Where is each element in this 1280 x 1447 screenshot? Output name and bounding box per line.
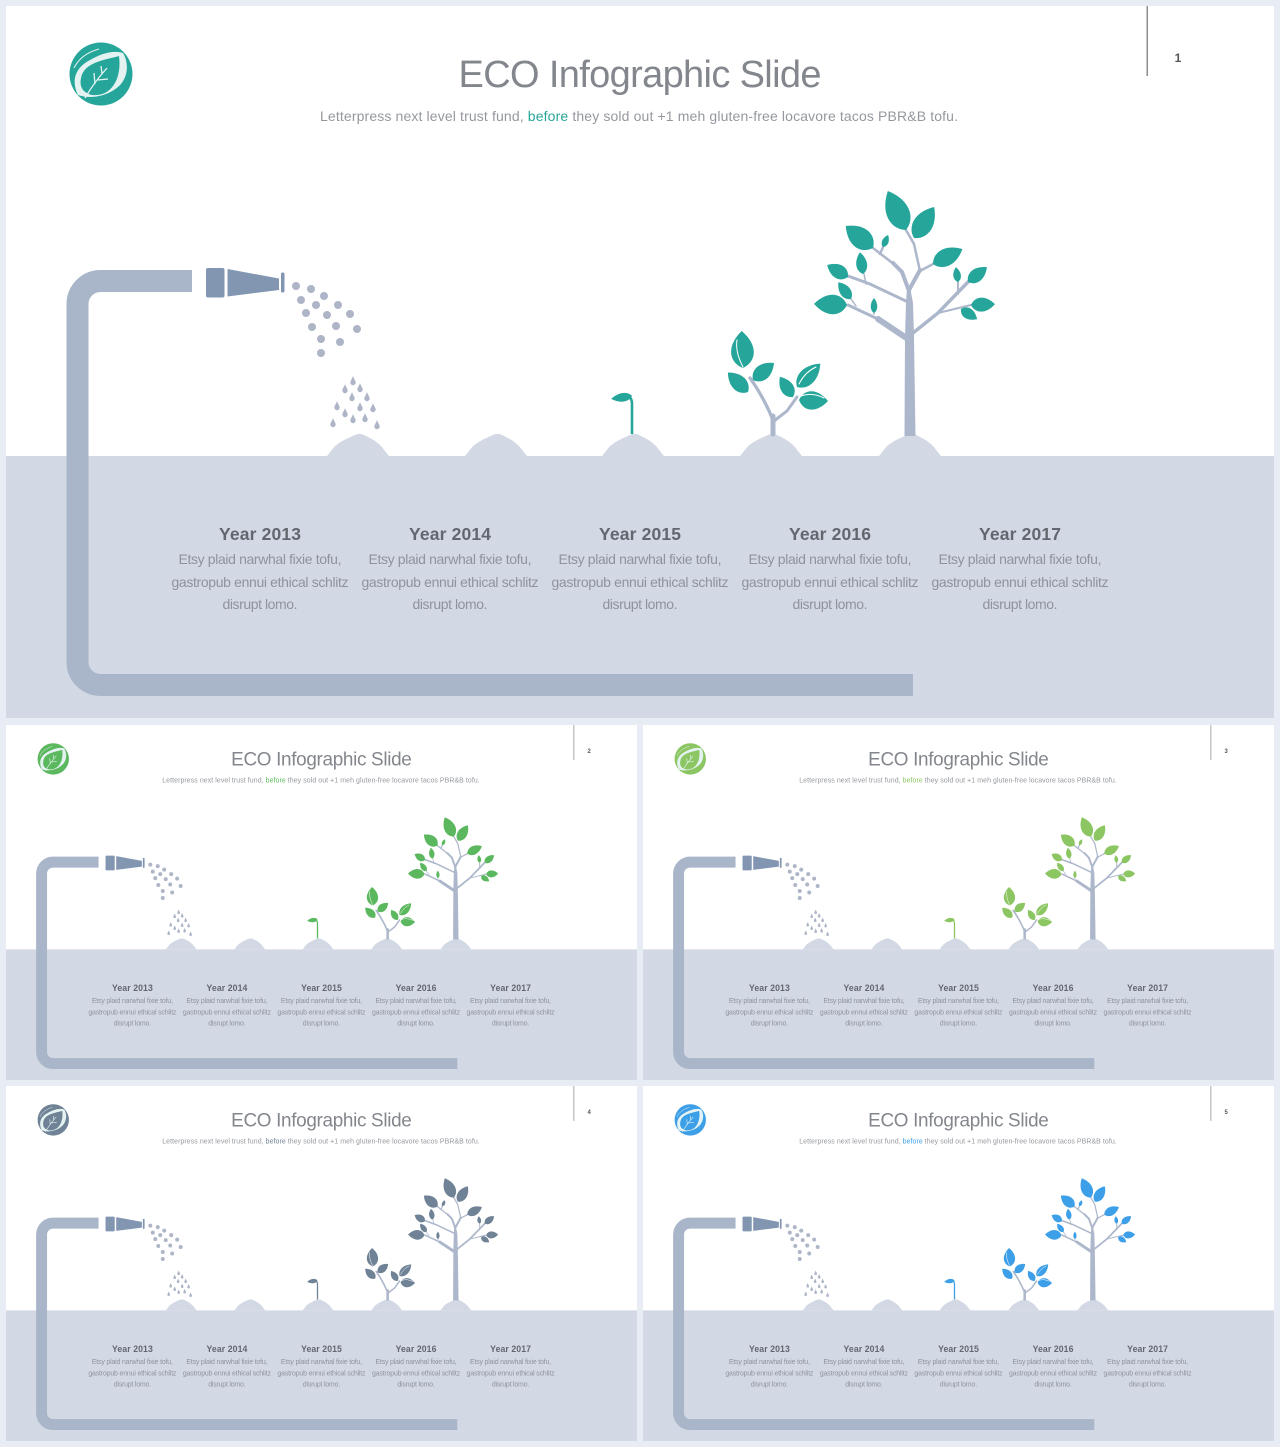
timeline text: 2013 — [172, 524, 348, 612]
timeline text: 2017 — [932, 524, 1108, 612]
slide 5 title: ECO Infographic Slide — [868, 1110, 1049, 1131]
timeline text: 2015: Etsy plaid narwhal fixie tofu, — [558, 551, 722, 567]
slide 2 timeline text: Year 2014 — [207, 983, 247, 993]
slide 3 timeline text: gastropub ennui ethical schlitz — [820, 1010, 908, 1017]
slide 3 timeline text: Etsy plaid narwhal fixie tofu, — [729, 998, 810, 1005]
slide 4 timeline text: Year 2017 — [490, 1344, 531, 1354]
slide 3 timeline text: gastropub ennui ethical schlitz — [725, 1010, 814, 1017]
slide 3 timeline text: Year 2017 — [1127, 983, 1168, 993]
slide 3 timeline text: disrupt lomo. — [1034, 1021, 1072, 1028]
slide 4 timeline text: Etsy plaid narwhal fixie tofu, — [92, 1359, 173, 1366]
slide 4 timeline text: Year 2016 — [396, 1344, 437, 1354]
slide 2 timeline text: gastropub ennui ethical schlitz — [277, 1010, 366, 1017]
timeline text: 2014: gastropub ennui ethical schlitz — [362, 574, 538, 590]
timeline text: 2013: Year 2013 — [219, 524, 301, 544]
slide 4 timeline text: Year 2014 — [207, 1344, 247, 1354]
slide 2 timeline text: disrupt lomo. — [114, 1021, 151, 1028]
slide 5 timeline text: gastropub ennui ethical schlitz — [914, 1371, 1003, 1378]
slide 5 timeline text: Year 2016 — [1033, 1344, 1074, 1354]
slide 4 timeline text: gastropub ennui ethical schlitz — [467, 1371, 555, 1378]
slide 2 timeline text: Etsy plaid narwhal fixie tofu, — [281, 998, 362, 1005]
slide 5 timeline text — [725, 1344, 1192, 1389]
slide 3 page number: 3 — [1225, 749, 1229, 755]
slide 5 timeline text: gastropub ennui ethical schlitz — [725, 1371, 814, 1378]
timeline text: 2016: gastropub ennui ethical schlitz — [742, 574, 918, 590]
slide 3 timeline text: disrupt lomo. — [751, 1021, 788, 1028]
page marker line — [1146, 6, 1148, 76]
timeline text: 2016 — [742, 524, 918, 612]
timeline text: 2015 — [552, 524, 728, 612]
timeline text: 2014: Year 2014 — [409, 524, 491, 544]
icon: leaf logo — [70, 42, 132, 106]
timeline text: 2013: Etsy plaid narwhal fixie tofu, — [178, 551, 342, 567]
slide 5 timeline text: Year 2013 — [749, 1344, 790, 1354]
timeline text: 2016: Etsy plaid narwhal fixie tofu, — [748, 551, 912, 567]
slide 2 timeline text: gastropub ennui ethical schlitz — [88, 1010, 177, 1017]
slide 3 timeline text: Year 2015 — [938, 983, 979, 993]
slide 3 timeline text: Etsy plaid narwhal fixie tofu, — [1012, 998, 1094, 1005]
slide 2 subtitle: Letterpress next level trust fund, before they sold out +1 meh gluten-free locavore tacos PBR&B tofu. — [162, 777, 480, 784]
timeline text: 2017: Year 2017 — [979, 524, 1061, 544]
slide 4 illustration — [6, 1086, 637, 1441]
title: ECO Infographic Slide — [458, 54, 822, 96]
slide 3 timeline text — [725, 983, 1192, 1028]
slide 3 timeline text: disrupt lomo. — [940, 1021, 977, 1028]
nozzle — [206, 268, 284, 298]
slide 2 timeline text: Etsy plaid narwhal fixie tofu, — [186, 998, 268, 1005]
slide 4 timeline text: gastropub ennui ethical schlitz — [183, 1371, 271, 1378]
slide 3 timeline text: gastropub ennui ethical schlitz — [1009, 1010, 1098, 1017]
slide 5 timeline text: Etsy plaid narwhal fixie tofu, — [1107, 1359, 1188, 1366]
slide 2 timeline text: disrupt lomo. — [397, 1021, 435, 1028]
slide 4 timeline text: gastropub ennui ethical schlitz — [88, 1371, 177, 1378]
hose — [78, 281, 913, 685]
slide 3 title: ECO Infographic Slide — [868, 749, 1049, 770]
slide 5 timeline text: Etsy plaid narwhal fixie tofu, — [1012, 1359, 1094, 1366]
slide 4 timeline text: disrupt lomo. — [492, 1382, 529, 1389]
timeline text: 2017: gastropub ennui ethical schlitz — [932, 574, 1108, 590]
slide 3 timeline text: gastropub ennui ethical schlitz — [1104, 1010, 1192, 1017]
water spray dots — [292, 282, 361, 357]
timeline text: 2015: gastropub ennui ethical schlitz — [552, 574, 728, 590]
slide 2 title: ECO Infographic Slide — [231, 749, 412, 770]
slide 3 timeline text: Etsy plaid narwhal fixie tofu, — [823, 998, 905, 1005]
timeline text: 2013: gastropub ennui ethical schlitz — [172, 574, 348, 590]
slide 1 illustration — [6, 6, 1274, 718]
grown tree — [814, 186, 995, 436]
slide 4 timeline text: Year 2013 — [112, 1344, 153, 1354]
slide 2 timeline text: gastropub ennui ethical schlitz — [183, 1010, 271, 1017]
slide 4 timeline text: Etsy plaid narwhal fixie tofu, — [186, 1359, 268, 1366]
slide 5 timeline text: disrupt lomo. — [1129, 1382, 1166, 1389]
slide 2 timeline text: gastropub ennui ethical schlitz — [467, 1010, 555, 1017]
slide 4 timeline text: disrupt lomo. — [303, 1382, 340, 1389]
slide 5 timeline text: disrupt lomo. — [1034, 1382, 1072, 1389]
slide 4 timeline text: gastropub ennui ethical schlitz — [372, 1371, 461, 1378]
slide 3 timeline text: gastropub ennui ethical schlitz — [914, 1010, 1003, 1017]
slide 3: light green — [643, 725, 1274, 1080]
slide 4 timeline text: Etsy plaid narwhal fixie tofu, — [375, 1359, 457, 1366]
slide 5 timeline text: gastropub ennui ethical schlitz — [820, 1371, 908, 1378]
timeline text: 2013: disrupt lomo. — [222, 596, 298, 612]
slide 2 timeline text: gastropub ennui ethical schlitz — [372, 1010, 461, 1017]
young plant — [723, 331, 828, 434]
slide 4: slate — [6, 1086, 637, 1441]
slide 4 timeline text: disrupt lomo. — [208, 1382, 246, 1389]
slide 4 subtitle: Letterpress next level trust fund, before they sold out +1 meh gluten-free locavore tacos PBR&B tofu. — [162, 1138, 480, 1145]
slide 3 timeline text: Etsy plaid narwhal fixie tofu, — [918, 998, 999, 1005]
slide 5 timeline text: disrupt lomo. — [845, 1382, 883, 1389]
subtitle: Letterpress next level trust fund, before they sold out +1 meh gluten-free locavore tacos PBR&B tofu. — [320, 108, 958, 124]
slide 2 timeline text: Etsy plaid narwhal fixie tofu, — [92, 998, 173, 1005]
slide 4 page number: 4 — [588, 1110, 592, 1116]
slide 5 illustration — [643, 1086, 1274, 1441]
slide 5 timeline text: Year 2014 — [844, 1344, 884, 1354]
slide 5: blue — [643, 1086, 1274, 1441]
slide 5 timeline text: gastropub ennui ethical schlitz — [1009, 1371, 1098, 1378]
timeline text: 2015: disrupt lomo. — [602, 596, 678, 612]
timeline text: 2015: Year 2015 — [599, 524, 681, 544]
slide 2 illustration — [6, 725, 637, 1080]
slide 2 timeline text: Year 2013 — [112, 983, 153, 993]
slide 5 timeline text: Etsy plaid narwhal fixie tofu, — [918, 1359, 999, 1366]
slide 3 timeline text: disrupt lomo. — [1129, 1021, 1166, 1028]
slide 3 timeline text: disrupt lomo. — [845, 1021, 883, 1028]
slide 4 timeline text: disrupt lomo. — [114, 1382, 151, 1389]
slide 5 timeline text: Etsy plaid narwhal fixie tofu, — [823, 1359, 905, 1366]
slide 2 timeline text: disrupt lomo. — [492, 1021, 529, 1028]
slide 2 page number: 2 — [588, 749, 592, 755]
soil mounds — [327, 434, 941, 456]
slide 2 timeline text: Year 2016 — [396, 983, 437, 993]
timeline text: 2016: disrupt lomo. — [792, 596, 868, 612]
slide 5 timeline text: disrupt lomo. — [751, 1382, 788, 1389]
timeline text: 2016: Year 2016 — [789, 524, 871, 544]
timeline text: 2017: disrupt lomo. — [982, 596, 1058, 612]
slide 5 timeline text: disrupt lomo. — [940, 1382, 977, 1389]
slide 5 timeline text: Year 2017 — [1127, 1344, 1168, 1354]
slide 4 timeline text: Year 2015 — [301, 1344, 342, 1354]
slide 2 timeline text: disrupt lomo. — [303, 1021, 340, 1028]
slide background — [6, 6, 1274, 718]
slide 4 timeline text: Etsy plaid narwhal fixie tofu, — [470, 1359, 551, 1366]
slide 5 subtitle: Letterpress next level trust fund, before they sold out +1 meh gluten-free locavore tacos PBR&B tofu. — [799, 1138, 1117, 1145]
slide 4 timeline text: disrupt lomo. — [397, 1382, 435, 1389]
slide 5 timeline text: Year 2015 — [938, 1344, 979, 1354]
slide 3 illustration — [643, 725, 1274, 1080]
slide 5 page number: 5 — [1225, 1110, 1229, 1116]
timeline text: 2014: disrupt lomo. — [412, 596, 488, 612]
timeline text: 2017: Etsy plaid narwhal fixie tofu, — [938, 551, 1102, 567]
slide 2 timeline text: Year 2017 — [490, 983, 531, 993]
slide 3 timeline text: Etsy plaid narwhal fixie tofu, — [1107, 998, 1188, 1005]
timeline text: 2014 — [362, 524, 538, 612]
slide 3 subtitle: Letterpress next level trust fund, before they sold out +1 meh gluten-free locavore tacos PBR&B tofu. — [799, 777, 1117, 784]
slide 2 timeline text: Etsy plaid narwhal fixie tofu, — [470, 998, 551, 1005]
slide 2: green — [6, 725, 637, 1080]
timeline text: 2014: Etsy plaid narwhal fixie tofu, — [368, 551, 532, 567]
slide 3 timeline text: Year 2013 — [749, 983, 790, 993]
slide 5 timeline text: Etsy plaid narwhal fixie tofu, — [729, 1359, 810, 1366]
slide 4 timeline text: Etsy plaid narwhal fixie tofu, — [281, 1359, 362, 1366]
slide 5 timeline text: gastropub ennui ethical schlitz — [1104, 1371, 1192, 1378]
slide 4 title: ECO Infographic Slide — [231, 1110, 412, 1131]
slide 3 timeline text: Year 2014 — [844, 983, 884, 993]
ground band — [6, 456, 1274, 718]
water drops — [330, 376, 380, 429]
slide 2 timeline text: Etsy plaid narwhal fixie tofu, — [375, 998, 457, 1005]
slide 2 timeline text: Year 2015 — [301, 983, 342, 993]
slide 1: teal — [6, 6, 1274, 718]
page number: 1 — [1175, 51, 1182, 65]
slide 2 timeline text: disrupt lomo. — [208, 1021, 246, 1028]
slide 2 timeline text — [88, 983, 555, 1028]
slide 3 timeline text: Year 2016 — [1033, 983, 1074, 993]
slide 4 timeline text — [88, 1344, 555, 1389]
slide 4 timeline text: gastropub ennui ethical schlitz — [277, 1371, 366, 1378]
sprout — [611, 392, 633, 434]
